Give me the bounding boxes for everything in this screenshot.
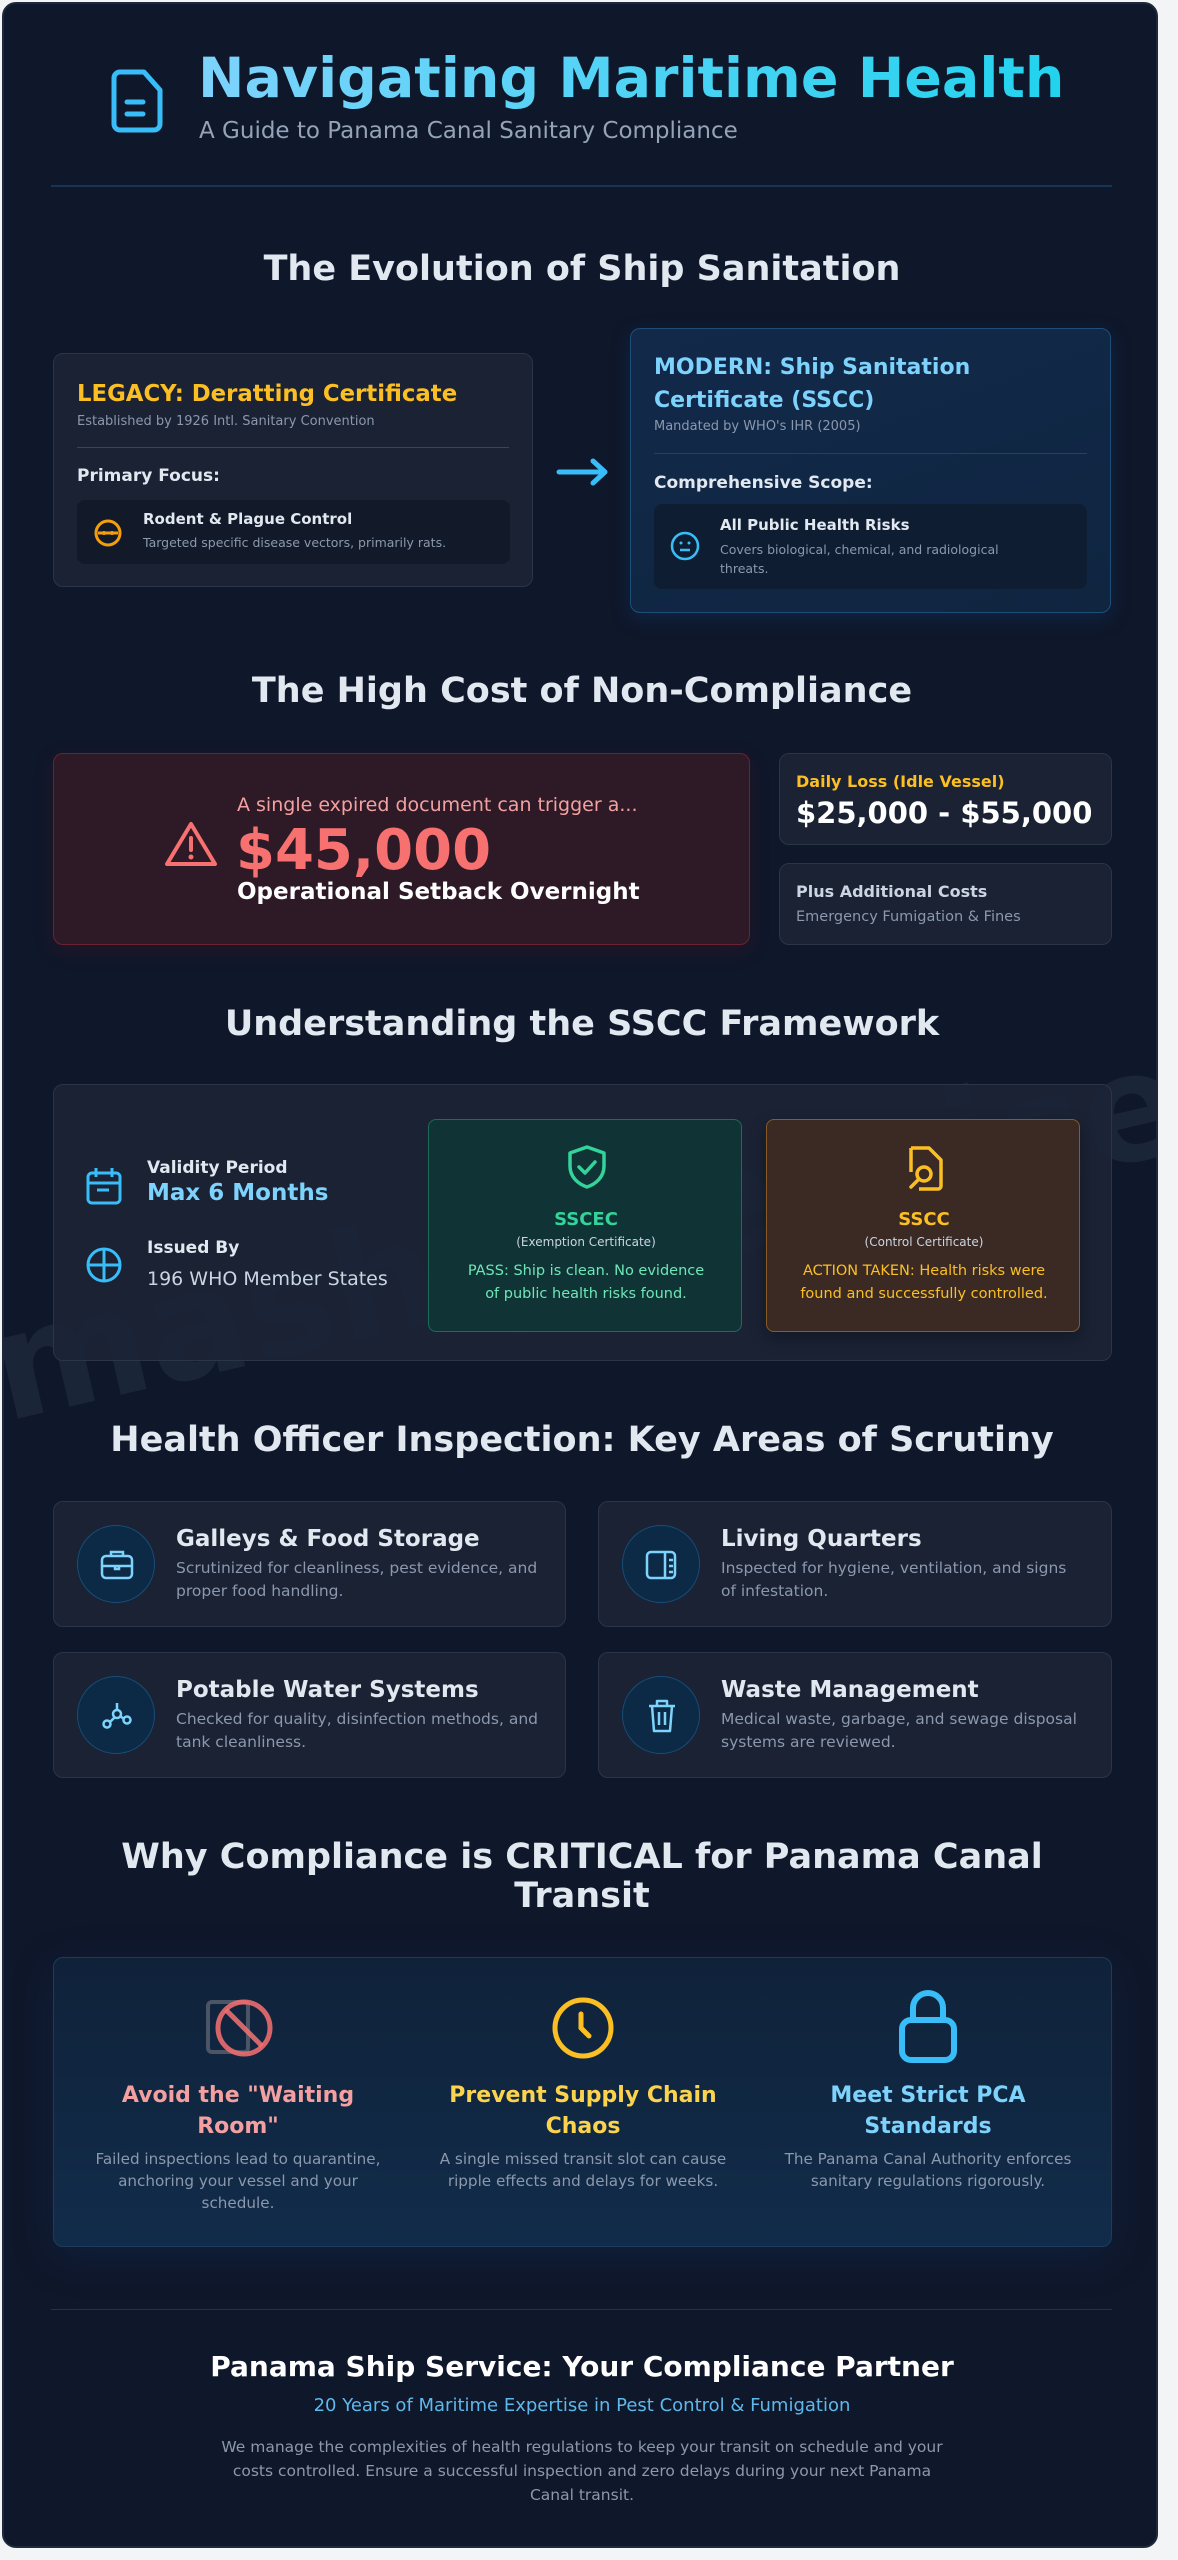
- scope item: [654, 504, 1087, 589]
- validity: Max 6 Months: [147, 1180, 328, 1206]
- panel: galleys: Scrutinized for cleanliness, pest evidence, and: [176, 1559, 537, 1577]
- focus item: [77, 500, 510, 564]
- subtitle: A Guide to Panama Canal Sanitary Compliance: [199, 118, 738, 144]
- panel: waste: [598, 1652, 1112, 1778]
- panel: cost main: A single expired document can trigger a...: [237, 794, 637, 816]
- column: PCA standards: Standards: [864, 2114, 992, 2139]
- icon: rodent control: [94, 520, 122, 546]
- footer: 20 Years of Maritime Expertise in Pest Control & Fumigation: [314, 2395, 850, 2416]
- heading: inspection: Health Officer Inspection: Key Areas of Scrutiny: [110, 1420, 1054, 1460]
- panel: additional costs: Emergency Fumigation & Fines: [796, 909, 1021, 925]
- focus item: Targeted specific disease vectors, primarily rats.: [143, 535, 446, 550]
- heading: why compliance: [121, 1837, 1043, 1916]
- panel: modern: MODERN: Ship Sanitation: [654, 355, 970, 380]
- panel: legacy: LEGACY: Deratting Certificate: [77, 381, 457, 407]
- icon: warning: [165, 822, 218, 866]
- issued by: [86, 1238, 388, 1290]
- column: waiting room: anchoring your vessel and your: [118, 2172, 358, 2190]
- SSCEC box: (Exemption Certificate): [516, 1235, 656, 1249]
- column: waiting room: Failed inspections lead to quarantine,: [96, 2150, 380, 2168]
- panel: framework: [53, 1084, 1112, 1361]
- icon: globe: [86, 1248, 122, 1282]
- column: supply chain: Prevent Supply Chain: [449, 2083, 717, 2108]
- column: waiting room: Avoid the "Waiting: [122, 2083, 354, 2108]
- heading: framework: Understanding the SSCC Framework: [225, 1004, 939, 1044]
- header: [112, 46, 1064, 144]
- title: Navigating Maritime Health: [198, 46, 1064, 111]
- footer: [210, 2350, 954, 2504]
- SSCEC box: PASS: Ship is clean. No evidence: [468, 1263, 704, 1279]
- panel: living quarters: Inspected for hygiene, ventilation, and signs: [721, 1559, 1066, 1577]
- panel: living quarters: of infestation.: [721, 1582, 828, 1600]
- issued by: 196 WHO Member States: [147, 1268, 388, 1290]
- heading: why compliance: Transit: [514, 1876, 650, 1916]
- icon: water system: [77, 1676, 155, 1754]
- panel: legacy: Primary Focus:: [77, 466, 220, 486]
- SSCEC box: SSCEC: [554, 1209, 618, 1230]
- SSCC box: found and successfully controlled.: [800, 1286, 1048, 1302]
- SSCEC box: of public health risks found.: [485, 1286, 687, 1302]
- column: waiting room: schedule.: [202, 2194, 274, 2212]
- column: PCA standards: The Panama Canal Authority enforces: [785, 2150, 1071, 2168]
- heading: evolution: The Evolution of Ship Sanitation: [264, 249, 900, 289]
- icon: briefcase: [77, 1525, 155, 1603]
- icon: calendar: [86, 1168, 122, 1204]
- panel: why compliance: [53, 1957, 1112, 2247]
- scope item: Covers biological, chemical, and radiological: [720, 542, 999, 557]
- icon: no entry: [206, 2000, 272, 2056]
- icon: document search: [909, 1146, 943, 1191]
- arrow: [556, 458, 608, 486]
- column: supply chain: A single missed transit slot can cause: [440, 2150, 726, 2168]
- column: waiting room: [96, 2000, 380, 2212]
- SSCC box: SSCC: [898, 1209, 950, 1230]
- icon: lock: [899, 1990, 957, 2063]
- panel: daily loss: $25,000 - $55,000: [796, 796, 1092, 830]
- SSCC box: ACTION TAKEN: Health risks were: [803, 1263, 1045, 1279]
- column: PCA standards: [784, 1990, 1071, 2190]
- panel: water: [53, 1652, 566, 1778]
- panel: living quarters: Living Quarters: [721, 1526, 922, 1552]
- column: supply chain: [440, 1998, 726, 2190]
- SSCEC box: [428, 1119, 742, 1332]
- column: supply chain: Chaos: [546, 2114, 620, 2139]
- panel: daily loss: Daily Loss (Idle Vessel): [796, 772, 1005, 791]
- scope item: All Public Health Risks: [720, 516, 910, 534]
- icon: document: [112, 70, 162, 132]
- panel: cost main: Operational Setback Overnight: [237, 879, 640, 905]
- heading: why compliance: Why Compliance is CRITICAL for Panama Canal: [121, 1837, 1043, 1877]
- panel: galleys: [53, 1501, 566, 1627]
- panel: legacy: [53, 353, 533, 587]
- panel: modern: [630, 328, 1111, 613]
- icon: shield: [568, 1145, 606, 1189]
- panel: cost main: [53, 753, 750, 945]
- panel: water: tank cleanliness.: [176, 1733, 306, 1751]
- SSCC box: [766, 1119, 1080, 1332]
- panel: waste: Medical waste, garbage, and sewage disposal: [721, 1710, 1077, 1728]
- column: waiting room: Room": [197, 2114, 279, 2139]
- footer: We manage the complexities of health regulations to keep your transit on schedule and your: [221, 2438, 943, 2456]
- panel: daily loss: [779, 753, 1112, 845]
- column: PCA standards: sanitary regulations rigorously.: [811, 2172, 1045, 2190]
- panel: cost main: $45,000: [236, 818, 491, 883]
- heading: cost: The High Cost of Non-Compliance: [252, 671, 912, 711]
- validity: [86, 1158, 328, 1206]
- scope item: threats.: [720, 561, 768, 576]
- footer: costs controlled. Ensure a successful inspection and zero delays during your next Panama: [233, 2462, 931, 2480]
- panel: modern: Comprehensive Scope:: [654, 473, 873, 493]
- SSCC box: (Control Certificate): [865, 1235, 983, 1249]
- panel: modern: Mandated by WHO's IHR (2005): [654, 419, 861, 434]
- panel: living quarters: [598, 1501, 1112, 1627]
- panel: waste: Waste Management: [721, 1677, 979, 1703]
- panel: galleys: proper food handling.: [176, 1582, 343, 1600]
- validity: Validity Period: [147, 1158, 288, 1178]
- panel: waste: systems are reviewed.: [721, 1733, 896, 1751]
- issued by: Issued By: [147, 1238, 239, 1258]
- panel: modern: Certificate (SSCC): [654, 388, 874, 413]
- icon: clock: [552, 1998, 614, 2058]
- panel: additional costs: Plus Additional Costs: [796, 882, 987, 901]
- focus item: Rodent & Plague Control: [143, 510, 352, 528]
- panel: additional costs: [779, 863, 1112, 945]
- icon: trash: [622, 1676, 700, 1754]
- panel: galleys: Galleys & Food Storage: [176, 1526, 480, 1552]
- panel: water: Checked for quality, disinfection methods, and: [176, 1710, 538, 1728]
- icon: face: [670, 532, 700, 560]
- footer: Canal transit.: [530, 2486, 634, 2504]
- column: PCA standards: Meet Strict PCA: [830, 2083, 1026, 2108]
- panel: legacy: Established by 1926 Intl. Sanitary Convention: [77, 414, 375, 429]
- column: supply chain: ripple effects and delays for weeks.: [448, 2172, 718, 2190]
- icon: quarters: [622, 1525, 700, 1603]
- panel: water: Potable Water Systems: [176, 1677, 479, 1703]
- footer: Panama Ship Service: Your Compliance Partner: [210, 2350, 954, 2383]
